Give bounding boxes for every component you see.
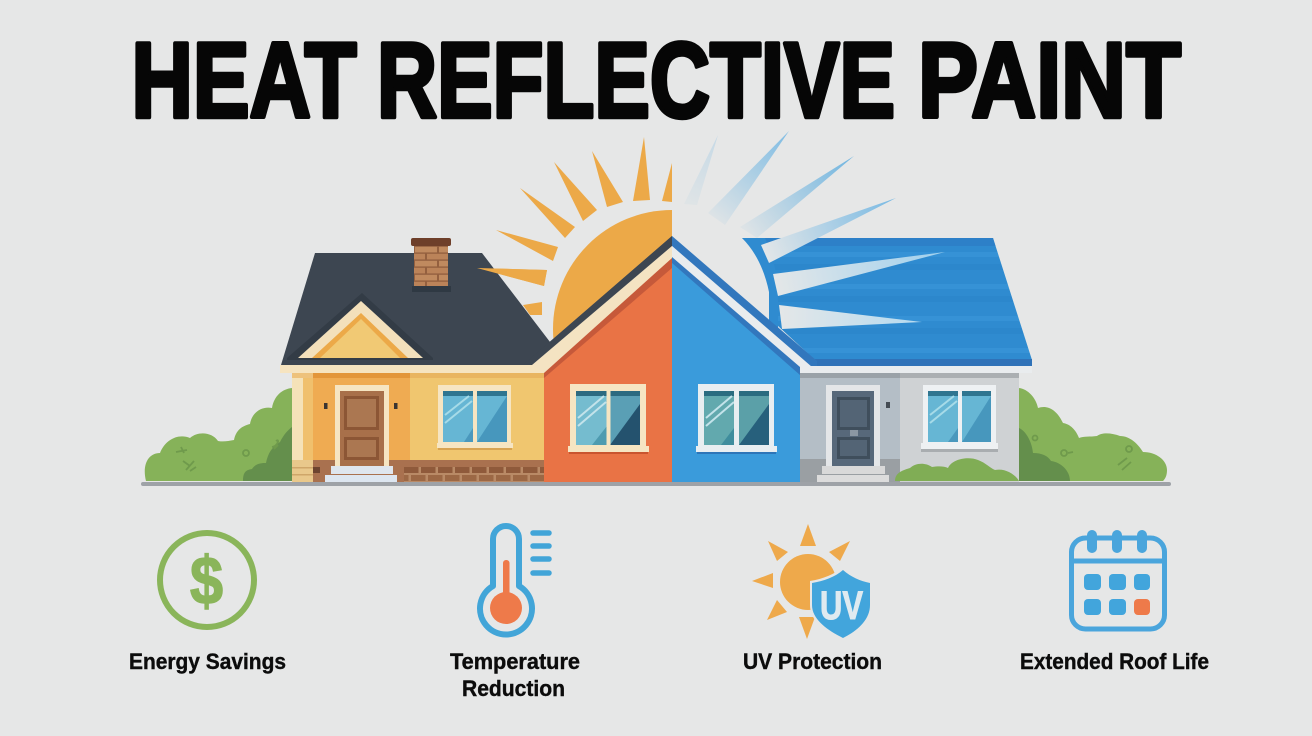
left dark roof [281, 236, 672, 365]
icon: reflected blue rays [684, 131, 945, 329]
sun ray over left roof [477, 268, 547, 286]
left house body [280, 365, 546, 482]
title [132, 20, 1181, 140]
ground line [141, 482, 1171, 486]
grey front steps [817, 466, 889, 482]
front door [335, 385, 389, 467]
benefit: uv protection [743, 524, 882, 674]
benefit: extended roof life [1020, 535, 1209, 674]
icon: orange sun with rays [494, 137, 672, 339]
left house roof edge bands [524, 236, 672, 373]
title: HEAT [132, 20, 356, 140]
title: REFLECTIVE [377, 20, 895, 140]
column base [292, 460, 313, 482]
icon: calendar [1071, 535, 1165, 629]
label: energy savings: Energy Savings [129, 649, 286, 674]
icon: door lights [324, 403, 398, 409]
right house roof edge bands [672, 236, 817, 375]
title: PAINT [918, 20, 1181, 140]
blue wall [672, 262, 800, 482]
icon: sun with uv shield [752, 524, 873, 641]
grey front door [826, 385, 880, 467]
chimney [411, 238, 451, 292]
window: blue wall [696, 384, 777, 454]
front steps [325, 466, 397, 482]
benefit: temperature reduction [450, 526, 580, 701]
right house body [800, 366, 1032, 482]
small shrub [895, 458, 1019, 481]
label: uv protection: UV Protection [743, 649, 882, 674]
label: temperature reduction: Reduction [462, 676, 565, 701]
illustration: half sun half reflected house [141, 131, 1171, 486]
label: temperature reduction: Temperature [450, 649, 580, 674]
icon: dollar coin [160, 533, 254, 627]
right bushes [1019, 388, 1167, 481]
label: temperature reduction [450, 649, 580, 701]
icon: thermometer [480, 526, 549, 635]
left roof gable [287, 293, 433, 360]
orange wall [544, 258, 672, 482]
icon: door light [886, 402, 890, 408]
window: orange wall [568, 384, 649, 454]
icon: dollar coin: $ [190, 543, 223, 619]
blue reflective roof [742, 238, 1032, 366]
brick base [313, 460, 546, 482]
label: extended roof life: Extended Roof Life [1020, 649, 1209, 674]
window: grey wall [921, 385, 998, 452]
window: yellow wall [437, 385, 513, 450]
icon: sun with uv shield: UV [820, 584, 863, 628]
benefit: energy savings [129, 533, 286, 674]
left bushes [145, 388, 292, 481]
